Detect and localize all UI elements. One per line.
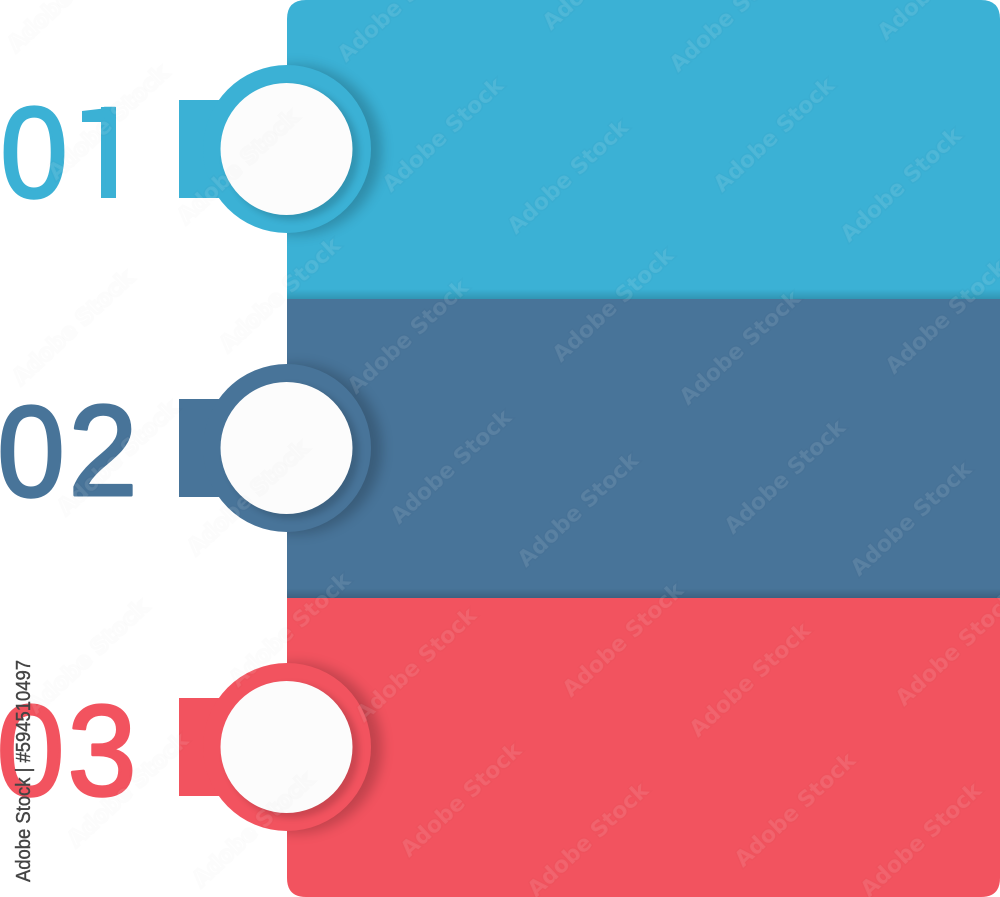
watermark pattern: Adobe Stock: [730, 747, 862, 872]
watermark pattern: Adobe Stock: [343, 274, 475, 399]
step 03 badge: [179, 663, 382, 833]
watermark pattern: Adobe Stock: [709, 72, 841, 197]
watermark pattern: Adobe Stock: [513, 447, 645, 572]
watermark pattern: Adobe Stock: [675, 285, 807, 410]
watermark pattern: Adobe Stock: [183, 435, 315, 560]
watermark pattern: Adobe Stock: [225, 567, 357, 692]
watermark pattern: Adobe Stock: [846, 456, 978, 581]
watermark pattern: Adobe Stock: [53, 395, 185, 520]
watermark pattern: Adobe Stock: [43, 60, 175, 185]
watermark pattern: Adobe Stock: [836, 122, 968, 247]
watermark pattern: Adobe Stock: [503, 114, 635, 239]
watermark pattern: Adobe Stock: [188, 767, 320, 892]
watermark pattern: Adobe Stock: [173, 104, 305, 229]
watermark id: Adobe Stock | #594510497: [13, 660, 35, 882]
watermark pattern: Adobe Stock: [396, 737, 528, 862]
panel: 01 blue band: [287, 0, 1000, 299]
number 01: [4, 105, 116, 200]
step 02 badge: [179, 364, 382, 534]
number 01: 0: [0, 81, 68, 225]
watermark pattern: Adobe Stock: [558, 577, 690, 702]
number 02: [0, 379, 137, 524]
panel: 02 slate band: [287, 299, 1000, 598]
watermark pattern: Adobe Stock: [386, 404, 518, 529]
number 03: 3: [68, 679, 136, 823]
number 02: 2: [69, 379, 137, 523]
watermark pattern: Adobe Stock: [685, 617, 817, 742]
watermark pattern: Adobe Stock: [351, 602, 483, 727]
number 01: 1: [71, 81, 143, 225]
watermark pattern: Adobe Stock: [8, 265, 140, 390]
band shadow: 01: [287, 289, 1000, 299]
band shadow: 02: [287, 588, 1000, 598]
step 01 badge: [179, 65, 382, 235]
watermark pattern: Adobe Stock: [548, 242, 680, 367]
watermark pattern: Adobe Stock: [63, 727, 195, 852]
watermark pattern: Adobe Stock: [378, 72, 510, 197]
panel: 03 red band: [287, 598, 1000, 897]
number 03: [0, 679, 136, 823]
watermark pattern: Adobe Stock: [23, 594, 155, 719]
watermark pattern: Adobe Stock: [720, 414, 852, 539]
watermark pattern: Adobe Stock: [215, 232, 347, 357]
